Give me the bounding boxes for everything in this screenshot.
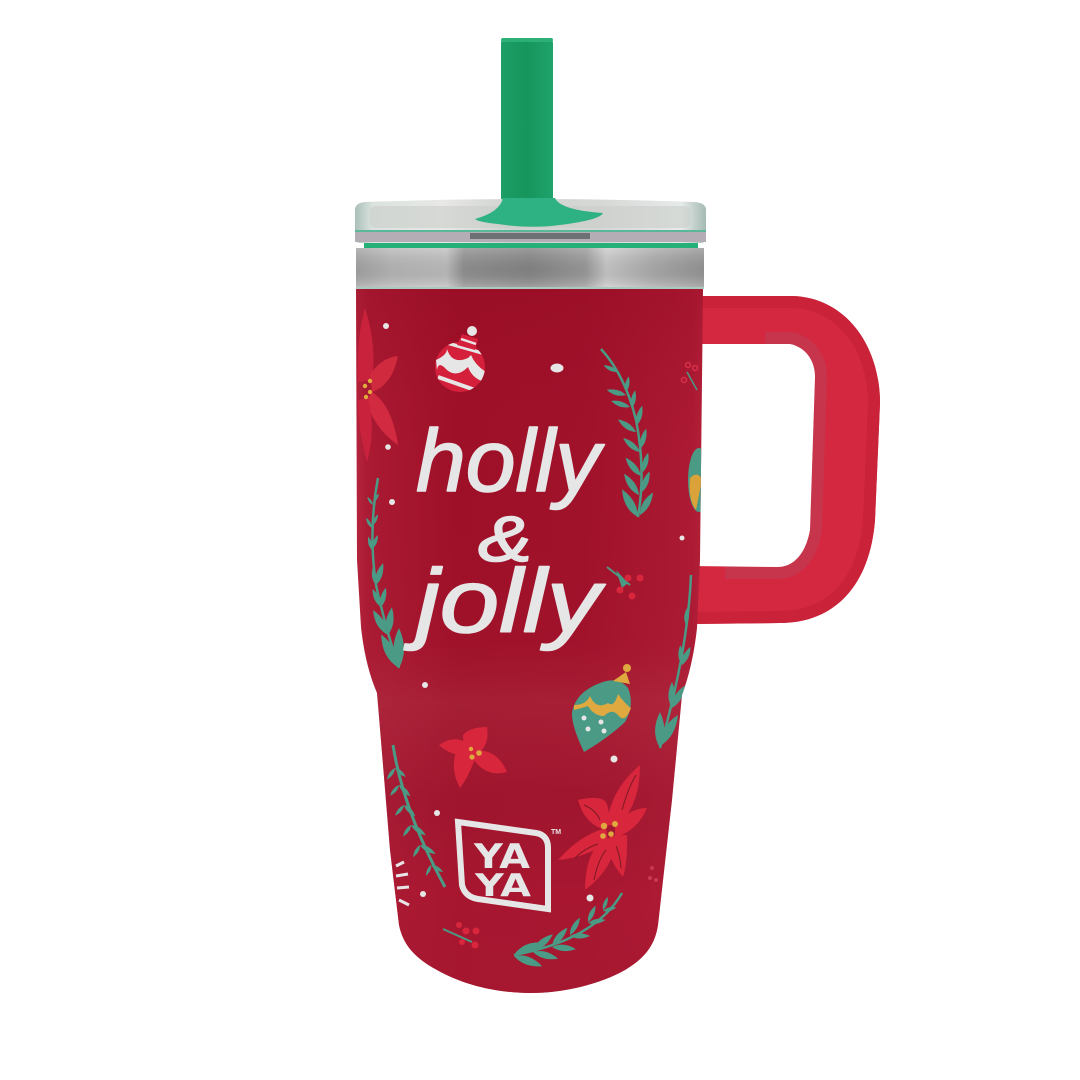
jolly: jolly [403, 552, 606, 652]
berries: bottom [443, 922, 480, 948]
poinsettia: large [558, 765, 647, 890]
logo [458, 822, 561, 909]
straw [501, 38, 553, 203]
ornament: red striped [435, 326, 486, 392]
branch: lower left [386, 745, 445, 887]
steel band [356, 248, 704, 289]
branch: bottom [512, 893, 622, 970]
berries: upper right [682, 362, 698, 390]
lid [355, 199, 706, 248]
berries: faint lower-right [648, 866, 658, 882]
poinsettia: left edge [358, 308, 398, 462]
straw base flange [475, 198, 603, 227]
ornament: green [572, 664, 631, 752]
holly: holly [416, 411, 605, 510]
branch: upper left [365, 478, 404, 670]
YA bottom row: YA [474, 868, 531, 904]
tumbler [350, 38, 880, 997]
body [350, 285, 710, 997]
branch: upper right [601, 349, 656, 519]
handle [690, 296, 880, 624]
YA top row: YA [473, 837, 531, 877]
ampersand: & [478, 503, 532, 575]
branch: right edge [655, 575, 693, 748]
snow dots [383, 323, 684, 902]
berries: mid [607, 567, 644, 600]
poinsettia: small [439, 727, 507, 788]
wording [403, 411, 606, 652]
trademark: TM [551, 829, 561, 836]
ornament: lower-left edge [396, 862, 409, 905]
ornament: partial right edge [688, 448, 702, 512]
